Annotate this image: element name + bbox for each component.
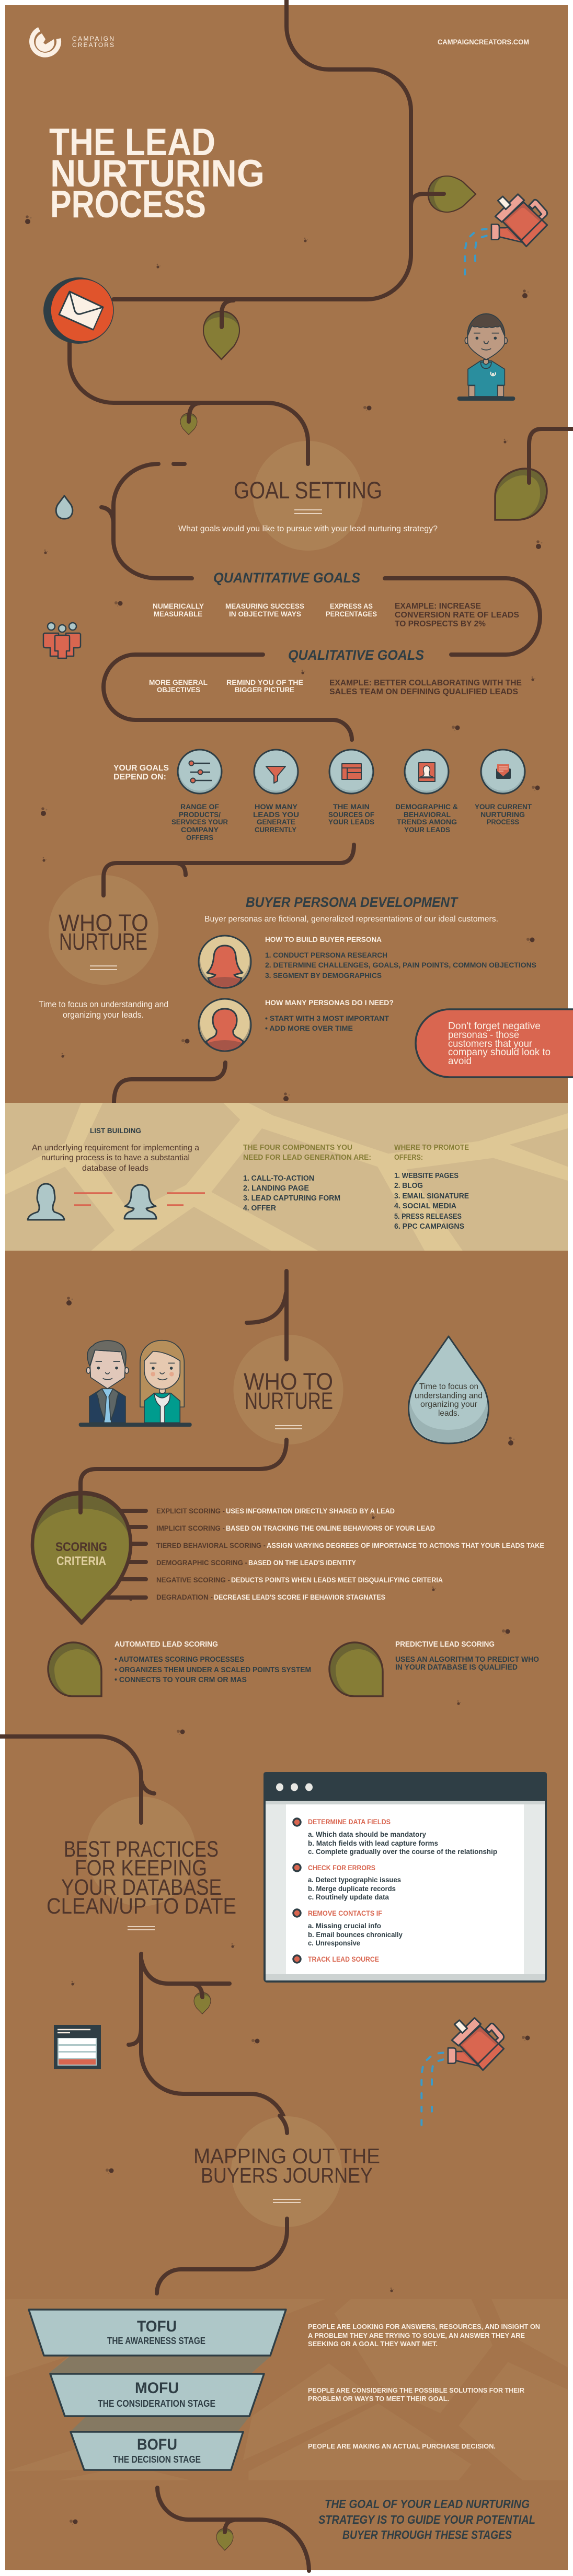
icon: hanging leaf under vine — [203, 311, 239, 359]
heading: buyer persona development — [204, 894, 498, 924]
factor 5: nurturing process: PROCESS — [487, 818, 519, 826]
how to build buyer persona: 2. DETERMINE CHALLENGES, GOALS, PAIN POINTS, COMMON OBJECTIONS — [265, 961, 536, 969]
closing statement: STRATEGY IS TO GUIDE YOUR POTENTIAL — [318, 2513, 535, 2526]
vine: goal setting stem over circle — [306, 441, 310, 464]
funnel stage: BOFU — [71, 2432, 243, 2470]
main title: NURTURING — [50, 153, 265, 195]
checklist: check for errors: CHECK FOR ERRORS — [308, 1863, 375, 1872]
scoring list: ASSIGN VARYING DEGREES OF IMPORTANCE TO ACTIONS THAT YOUR LEADS TAKE — [267, 1542, 544, 1549]
qualitative goal traits: MORE GENERAL — [149, 678, 208, 686]
callout drop: time to focus: understanding and — [415, 1392, 483, 1400]
icon: watering can and water drops — [465, 194, 547, 274]
icon: final small leaf — [216, 2528, 233, 2550]
heading: mapping out the buyers journey — [193, 2144, 380, 2202]
predictive lead scoring text — [395, 1640, 539, 1672]
vine: branch to the right — [141, 1959, 230, 1984]
vine: left twig to form icon — [129, 2027, 141, 2045]
automated lead scoring text: • ORGANIZES THEM UNDER A SCALED POINTS SYSTEM — [114, 1666, 311, 1674]
list building intro: LIST BUILDING — [90, 1126, 141, 1135]
callout: negative personas: Don't forget negative — [448, 1020, 541, 1032]
TOFU description: SEEKING OR A GOAL THEY WANT MET. — [308, 2340, 438, 2348]
vine: closing curve — [157, 2488, 309, 2571]
scoring list: DEGRADATION - — [156, 1593, 213, 1601]
factor 1: range of products: COMPANY — [181, 826, 219, 834]
heading: goal setting — [178, 477, 438, 533]
four components list — [243, 1144, 371, 1213]
scoring list: DEDUCTS POINTS WHEN LEADS MEET DISQUALIFYING CRITERIA — [231, 1576, 443, 1584]
list building intro: database of leads — [82, 1164, 148, 1173]
quantitative goal traits: MEASURABLE — [154, 610, 202, 618]
icon: water droplet — [56, 496, 73, 519]
funnel stage: MOFU — [50, 2374, 264, 2416]
icon: envelope badge — [43, 277, 113, 344]
vine: goal setting left loop — [113, 464, 192, 578]
closing statement — [318, 2497, 535, 2542]
factor 5: nurturing process — [475, 749, 532, 826]
businessman — [86, 1341, 129, 1423]
vine: end of best practices over circle — [280, 2116, 287, 2133]
checklist: determine data fields: a. Which data should be mandatory — [308, 1831, 426, 1838]
icon: predictive scoring leaf — [329, 1642, 383, 1696]
where to promote list: WHERE TO PROMOTE — [394, 1144, 469, 1152]
icon: small leaf after best practices — [194, 1992, 211, 2014]
funnel stage: TOFU — [29, 2310, 286, 2356]
callout drop: time to focus — [409, 1336, 488, 1443]
checklist: determine data fields: DETERMINE DATA FIELDS — [308, 1817, 391, 1826]
vine: loop into goal setting — [529, 429, 573, 483]
vine: twig near best practices — [141, 1780, 154, 1793]
how many personas — [265, 998, 394, 1032]
factor 4: demographic trends: BEHAVIORAL — [404, 811, 451, 819]
TOFU description: PEOPLE ARE LOOKING FOR ANSWERS, RESOURCES, AND INSIGHT ON — [308, 2323, 540, 2330]
factor 3: main sources: THE MAIN — [333, 803, 370, 811]
section circle: mapping out — [231, 2116, 342, 2227]
MOFU description: PEOPLE ARE CONSIDERING THE POSSIBLE SOLUTIONS FOR THEIR — [308, 2386, 525, 2394]
callout: negative personas: customers that your — [448, 1038, 532, 1050]
closing statement: BUYER THROUGH THESE STAGES — [342, 2528, 512, 2542]
factor 2: leads generated: LEADS YOU — [253, 811, 299, 819]
illustration: man with logo shirt — [457, 314, 515, 401]
vine: mapping to funnel — [157, 2219, 287, 2293]
heading: buyer persona development: Buyer personas are fictional, generalized representations of our ideal customers. — [204, 915, 498, 924]
predictive lead scoring text: USES AN ALGORITHM TO PREDICT WHO — [395, 1656, 539, 1664]
four components list: 4. OFFER — [243, 1204, 277, 1213]
checklist: determine data fields — [293, 1817, 497, 1856]
factor 3: main sources — [328, 749, 374, 826]
panel: scoring criteria leaf: SCORING — [55, 1540, 107, 1554]
predictive lead scoring text: PREDICTIVE LEAD SCORING — [395, 1640, 495, 1649]
factor 4: demographic trends: YOUR LEADS — [404, 826, 450, 834]
funnel stage: BOFU: THE DECISION STAGE — [113, 2454, 201, 2465]
vine: personas to list building — [114, 1063, 225, 1103]
automated lead scoring text: AUTOMATED LEAD SCORING — [114, 1640, 218, 1649]
main title: PROCESS — [50, 183, 206, 226]
icon: right leaf on top vine — [411, 176, 476, 212]
faint road pattern behind funnel — [5, 2299, 568, 2480]
avatar: female persona — [199, 935, 251, 988]
scoring list: DEMOGRAPHIC SCORING - — [156, 1559, 247, 1567]
callout drop: time to focus: leads. — [438, 1409, 460, 1418]
where to promote list: 2. BLOG — [394, 1182, 423, 1190]
logo: Campaign Creators — [32, 29, 114, 55]
logo: Campaign Creators: CREATORS — [72, 41, 114, 49]
automated lead scoring text: • CONNECTS TO YOUR CRM OR MAS — [114, 1676, 247, 1684]
qualitative example: EXAMPLE: BETTER COLLABORATING WITH THE — [329, 679, 522, 687]
heading: mapping out the buyers journey: BUYERS JOURNEY — [201, 2163, 373, 2187]
checklist: determine data fields: c. Complete gradually over the course of the relationship — [308, 1848, 497, 1856]
checklist: track lead source: TRACK LEAD SOURCE — [308, 1955, 379, 1963]
factor 5: nurturing process: NURTURING — [480, 811, 525, 819]
vine: down into second who to nurture — [284, 1271, 289, 1359]
factor 5: nurturing process: YOUR CURRENT — [475, 803, 532, 811]
scoring list: BASED ON THE LEAD'S IDENTITY — [248, 1559, 356, 1567]
heading: second who to nurture — [244, 1368, 333, 1429]
quantitative goal traits: MEASURING SUCCESS — [225, 602, 304, 610]
list building intro — [32, 1126, 199, 1173]
four components list: 3. LEAD CAPTURING FORM — [243, 1194, 340, 1203]
factor 2: leads generated: GENERATE — [257, 818, 295, 826]
icon: second watering can and water drops — [421, 2018, 504, 2125]
main title: THE LEAD — [49, 121, 215, 164]
icon: male silhouette — [28, 1184, 64, 1220]
factor 2: leads generated: CURRENTLY — [255, 826, 296, 834]
logo: Campaign Creators: CAMPAIGN — [72, 35, 114, 42]
factor 1: range of products: RANGE OF — [180, 803, 219, 811]
list building intro: nurturing process is to have a substantial — [41, 1153, 190, 1162]
heading: second who to nurture: WHO TO — [244, 1368, 333, 1395]
how many personas: • START WITH 3 MOST IMPORTANT — [265, 1014, 389, 1022]
factor 1: range of products: OFFERS — [186, 834, 213, 842]
factor 2: leads generated — [253, 749, 299, 834]
checklist: remove contacts if: b. Email bounces chronically — [308, 1931, 403, 1939]
MOFU description — [308, 2386, 525, 2403]
heading: best practices: CLEAN/UP TO DATE — [47, 1894, 236, 1919]
checklist: determine data fields: b. Match fields with lead capture forms — [308, 1839, 438, 1847]
checklist: check for errors: b. Merge duplicate records — [308, 1885, 396, 1893]
factor 3: main sources: SOURCES OF — [328, 811, 374, 819]
panel: list building band — [5, 1103, 568, 1251]
icon: group of people — [43, 623, 81, 658]
vine: down to scoring criteria — [81, 1440, 286, 1494]
vine: top path from page edge to envelope — [113, 0, 411, 299]
callout: negative personas: company should look to — [448, 1046, 551, 1058]
qualitative example — [329, 679, 522, 696]
where to promote list: OFFERS: — [394, 1153, 423, 1162]
vine: best practices down to mapping — [141, 1954, 287, 2133]
red dashes beside silhouettes — [74, 1193, 205, 1205]
quantitative goal traits: NUMERICALLY — [153, 602, 204, 610]
where to promote list: 6. PPC CAMPAIGNS — [394, 1222, 464, 1231]
icon: female silhouette — [124, 1185, 156, 1219]
icon: lead capture form — [54, 2025, 101, 2069]
callout: negative personas: personas - those — [448, 1029, 519, 1041]
scoring list — [156, 1507, 544, 1601]
how to build buyer persona: 1. CONDUCT PERSONA RESEARCH — [265, 951, 387, 959]
quantitative goal traits: IN OBJECTIVE WAYS — [229, 610, 301, 618]
predictive lead scoring text: IN YOUR DATABASE IS QUALIFIED — [395, 1663, 518, 1672]
heading: best practices: BEST PRACTICES — [64, 1837, 219, 1862]
qualitative example: SALES TEAM ON DEFINING QUALIFIED LEADS — [329, 687, 518, 696]
four components list: NEED FOR LEAD GENERATION ARE: — [243, 1153, 371, 1162]
funnel stage: BOFU: BOFU — [137, 2436, 177, 2453]
callout: negative personas: avoid — [448, 1055, 472, 1067]
qualitative goal traits — [149, 678, 303, 694]
funnel stage: TOFU: THE AWARENESS STAGE — [107, 2336, 205, 2346]
section circle: who to nurture — [49, 875, 158, 985]
heading: who to nurture: WHO TO — [59, 910, 148, 936]
vine: twig toward persona — [175, 863, 186, 875]
where to promote list: 5. PRESS RELEASES — [394, 1213, 462, 1221]
vine: stem to final leaf — [225, 2520, 234, 2532]
vine: left bend below qualitative goals — [104, 655, 352, 740]
panel: browser window checklist — [263, 1772, 547, 1981]
four components list: 1. CALL-TO-ACTION — [243, 1174, 314, 1183]
where to promote list: 3. EMAIL SIGNATURE — [394, 1192, 469, 1200]
MOFU description: PROBLEM OR WAYS TO MEET THEIR GOAL. — [308, 2395, 449, 2403]
heading: goal setting: What goals would you like to pursue with your lead nurturing strategy? — [178, 524, 438, 533]
factor 4: demographic trends: TRENDS AMONG — [397, 818, 457, 826]
heading: who to nurture — [59, 910, 148, 970]
funnel stage: MOFU: THE CONSIDERATION STAGE — [98, 2398, 215, 2409]
vine: stem to small leaf — [192, 1984, 202, 1997]
checklist: remove contacts if: REMOVE CONTACTS IF — [308, 1909, 382, 1917]
BOFU description: PEOPLE ARE MAKING AN ACTUAL PURCHASE DECISION. — [308, 2442, 496, 2450]
qualitative goal traits: REMIND YOU OF THE — [226, 678, 303, 686]
label: your goals depend on: YOUR GOALS — [113, 764, 169, 773]
panel: scoring criteria leaf — [32, 1484, 131, 1623]
scoring connector bars — [99, 1511, 146, 1598]
vine: envelope to goal setting — [70, 342, 308, 464]
vine: stem to hanging leaf — [222, 300, 234, 327]
checklist: remove contacts if: c. Unresponsive — [308, 1939, 360, 1947]
website address: CAMPAIGNCREATORS.COM — [438, 38, 529, 46]
list building intro: An underlying requirement for implementing a — [32, 1144, 199, 1152]
vine: from goals row down to who to nurture — [104, 845, 354, 895]
heading: who to nurture: NURTURE — [59, 928, 147, 955]
vine: dash segment — [174, 462, 185, 466]
funnel stage: TOFU: TOFU — [137, 2318, 177, 2335]
illustration: businessman and businesswoman — [79, 1341, 192, 1427]
vine: twig left — [101, 507, 113, 522]
businesswoman — [140, 1341, 184, 1423]
label: your goals depend on — [113, 764, 169, 782]
how to build buyer persona: HOW TO BUILD BUYER PERSONA — [265, 935, 382, 943]
text: time to focus: Time to focus on understanding and — [39, 999, 168, 1009]
callout drop: time to focus: Time to focus on — [419, 1382, 478, 1391]
scoring list: BASED ON TRACKING THE ONLINE BEHAVIORS OF YOUR LEAD — [226, 1524, 435, 1532]
quantitative example: TO PROSPECTS BY 2% — [395, 620, 486, 628]
qualitative goal traits: OBJECTIVES — [157, 685, 200, 694]
heading: qualitative goals: QUALITATIVE GOALS — [288, 647, 424, 663]
scoring list: NEGATIVE SCORING - — [156, 1576, 230, 1584]
factor 2: leads generated: HOW MANY — [255, 803, 297, 811]
checklist: remove contacts if: a. Missing crucial info — [308, 1922, 381, 1930]
factor 1: range of products: PRODUCTS/ — [179, 811, 221, 819]
heading: goal setting: GOAL SETTING — [234, 477, 382, 504]
factor 3: main sources: YOUR LEADS — [328, 818, 374, 826]
main title — [49, 121, 265, 226]
quantitative goal traits — [153, 602, 377, 618]
checklist: check for errors — [293, 1863, 401, 1901]
scoring list: IMPLICIT SCORING - — [156, 1524, 225, 1532]
heading: best practices: FOR KEEPING — [75, 1856, 207, 1881]
four components list: THE FOUR COMPONENTS YOU — [243, 1144, 352, 1152]
vine: right bend between goals — [385, 578, 540, 655]
automated lead scoring text: • AUTOMATES SCORING PROCESSES — [114, 1656, 244, 1664]
quantitative example: CONVERSION RATE OF LEADS — [395, 611, 519, 620]
factor 4: demographic trends — [395, 749, 458, 834]
TOFU description — [308, 2323, 540, 2348]
icon: small leaf under vine — [180, 413, 197, 435]
factor 1: range of products: SERVICES YOUR — [171, 818, 228, 826]
avatar: male persona — [199, 998, 251, 1051]
heading: best practices — [47, 1837, 236, 1930]
scoring list: EXPLICIT SCORING - — [156, 1507, 225, 1515]
section circle: second who to nurture — [233, 1335, 343, 1444]
section circle: goal setting — [253, 441, 363, 551]
icon: corner leaf at right — [495, 444, 547, 520]
where to promote list — [394, 1144, 469, 1231]
heading: second who to nurture: NURTURE — [245, 1388, 333, 1414]
text: time to focus — [39, 999, 168, 1020]
closing statement: THE GOAL OF YOUR LEAD NURTURING — [325, 2497, 530, 2511]
how to build buyer persona: 3. SEGMENT BY DEMOGRAPHICS — [265, 971, 382, 980]
factor 1: range of products — [171, 749, 228, 842]
checklist: remove contacts if — [293, 1909, 403, 1947]
qualitative goal traits: BIGGER PICTURE — [235, 685, 294, 694]
quantitative goal traits: EXPRESS AS — [330, 602, 373, 610]
label: your goals depend on: DEPEND ON: — [113, 773, 166, 782]
vine: from left edge to best practices — [0, 1736, 141, 1823]
section circle: best practices — [86, 1797, 196, 1906]
quantitative example: EXAMPLE: INCREASE — [395, 602, 481, 611]
TOFU description: A PROBLEM THEY ARE TRYING TO SOLVE, AN ANSWER THEY ARE — [308, 2332, 525, 2339]
scoring list: USES INFORMATION DIRECTLY SHARED BY A LEAD — [226, 1507, 395, 1515]
heading: quantitative goals: QUANTITATIVE GOALS — [213, 570, 360, 586]
four components list: 2. LANDING PAGE — [243, 1184, 309, 1193]
automated lead scoring text — [114, 1640, 311, 1684]
how many personas: • ADD MORE OVER TIME — [265, 1024, 353, 1032]
heading: best practices: YOUR DATABASE — [61, 1875, 222, 1900]
vine: stem to small leaf — [189, 403, 199, 422]
where to promote list: 4. SOCIAL MEDIA — [394, 1202, 457, 1210]
quantitative goal traits: PERCENTAGES — [326, 610, 377, 618]
factor 4: demographic trends: DEMOGRAPHIC & — [395, 803, 458, 811]
funnel stage: MOFU: MOFU — [135, 2380, 179, 2397]
scoring list: DECREASE LEAD'S SCORE IF BEHAVIOR STAGNATES — [214, 1593, 385, 1601]
callout: negative personas — [416, 1009, 573, 1077]
funnel shadows — [49, 2357, 270, 2432]
icon: automated scoring leaf — [48, 1642, 101, 1696]
text: time to focus: organizing your leads. — [63, 1010, 144, 1020]
callout drop: time to focus: organizing your — [420, 1400, 478, 1409]
quantitative example — [395, 602, 519, 628]
heading: buyer persona development: BUYER PERSONA DEVELOPMENT — [246, 894, 459, 910]
vine: twig left of second who to nurture — [247, 1293, 286, 1323]
checklist: check for errors: a. Detect typographic issues — [308, 1876, 401, 1884]
checklist: check for errors: c. Routinely update data — [308, 1893, 389, 1901]
how many personas: HOW MANY PERSONAS DO I NEED? — [265, 998, 394, 1007]
scoring list: TIERED BEHAVIORAL SCORING - — [156, 1542, 266, 1549]
where to promote list: 1. WEBSITE PAGES — [394, 1172, 459, 1180]
panel: scoring criteria leaf: CRITERIA — [56, 1554, 106, 1568]
how to build buyer persona — [265, 935, 536, 980]
heading: mapping out the buyers journey: MAPPING OUT THE — [193, 2144, 380, 2168]
